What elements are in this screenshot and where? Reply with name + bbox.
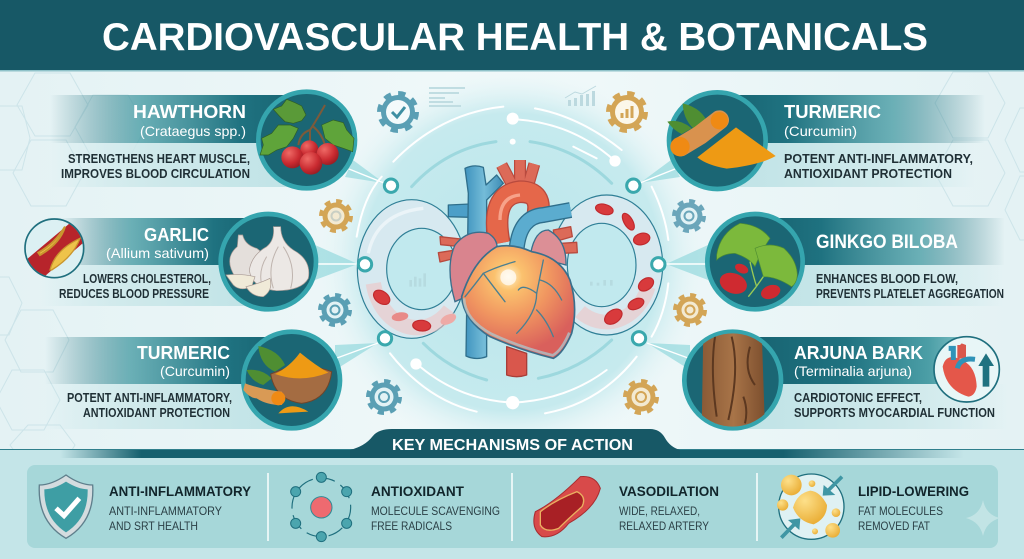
mechanism: antioxidant [291,472,500,542]
mechanism: lipid-lowering: REMOVED FAT [858,519,931,533]
ventricles [462,246,575,358]
panel: turmeric right: (Curcumin) [784,123,857,139]
icon: artery [534,476,600,537]
mechanism: antioxidant: FREE RADICALS [371,519,452,533]
panel: turmeric right [667,92,985,189]
sparkle [966,500,1000,536]
icon: gold gear lower right [625,381,657,413]
hexagon background pattern [0,72,1024,470]
icon: garlic bulbs [221,214,316,309]
central heart diagram [357,107,668,413]
panel: turmeric left: POTENT ANTI-INFLAMMATORY, [67,391,232,405]
panel: garlic: REDUCES BLOOD PRESSURE [59,287,209,301]
mechanisms band background [0,450,1024,559]
panel: ginkgo biloba [707,214,1005,309]
mechanism: lipid-lowering: FAT MOLECULES [858,504,943,518]
panel: arjuna bark [684,330,1010,430]
mechanism: antioxidant: MOLECULE SCAVENGING [371,504,500,518]
panel: garlic: LOWERS CHOLESTEROL, [83,272,211,286]
panel: ginkgo biloba: ENHANCES BLOOD FLOW, [816,272,958,286]
mechanism: lipid-lowering [777,474,969,539]
panel: garlic: GARLIC [144,224,209,245]
panel: turmeric left: ANTIOXIDANT PROTECTION [83,406,230,420]
coronary vessels [465,260,562,337]
panel: arjuna bark: CARDIOTONIC EFFECT, [794,391,922,405]
mechanism: anti-inflammatory: ANTI-INFLAMMATORY [109,504,222,518]
mechanism: vasodilation [534,476,719,537]
panel: turmeric left [45,332,340,429]
title banner: CARDIOVASCULAR HEALTH & BOTANICALS [102,16,928,59]
icon: turmeric root and powder [667,92,776,189]
panel: garlic: (Allium sativum) [106,245,209,261]
great vessels [438,160,577,377]
right circulation loop [551,195,663,335]
panel: garlic [20,214,316,309]
icon: molecule [291,472,352,542]
panel: hawthorn: IMPROVES BLOOD CIRCULATION [61,167,250,181]
panel: hawthorn: (Crataegus spp.) [140,123,246,139]
ventricle glass edge [464,298,569,355]
mechanism: vasodilation: WIDE, RELAXED, [619,504,700,518]
panel: turmeric left: TURMERIC [137,342,230,363]
atria [450,230,566,302]
panel: ginkgo biloba: GINKGO BILOBA [816,232,958,253]
icon: blue gear right top [674,201,704,231]
icon: fat molecules [777,474,844,539]
panel: turmeric right: ANTIOXIDANT PROTECTION [784,167,952,181]
circular arcs around heart [357,107,668,413]
connector beams [315,160,708,370]
heart highlight [500,269,516,285]
panel: hawthorn [50,92,355,188]
icon: blue gear left bottom [320,295,350,325]
icon: ginkgo leaves [707,214,803,309]
icon: hawthorn berries [258,92,355,188]
panel: mechanisms [27,465,1000,548]
mechanism: anti-inflammatory: AND SRT HEALTH [109,519,198,533]
panel: hawthorn: HAWTHORN [133,101,246,122]
connection nodes [358,179,665,345]
panel: arjuna bark: (Terminalia arjuna) [794,363,912,379]
mechanism: vasodilation: RELAXED ARTERY [619,519,709,533]
heading: key mechanisms of action [350,429,680,458]
panel: turmeric left: (Curcumin) [160,363,230,379]
decorative mini bar chart [565,86,596,106]
panel: turmeric right: POTENT ANTI-INFLAMMATORY, [784,152,973,166]
mechanism: vasodilation: VASODILATION [619,483,719,499]
central glow [314,64,710,460]
panel: hawthorn: STRENGTHENS HEART MUSCLE, [68,152,250,166]
panel: arjuna bark: ARJUNA BARK [794,342,924,363]
mechanism: antioxidant: ANTIOXIDANT [371,483,464,499]
icon: artery with plaque [24,218,84,278]
separator line [0,449,1024,458]
icon: turmeric bowl [243,332,340,428]
icon: gold gear left top [321,201,351,231]
decorative report lines [429,87,465,107]
icon: gold gear right bottom [675,295,705,325]
icon: shield [39,475,93,538]
panel: turmeric right: TURMERIC [784,101,881,122]
icon: heart with up arrow [934,337,999,402]
icon: blue gear lower left [368,381,400,413]
title banner [0,0,1024,72]
mechanism: anti-inflammatory [39,475,252,538]
mechanism: anti-inflammatory: ANTI-INFLAMMATORY [109,483,252,499]
icon: bark [684,330,781,430]
heading: key mechanisms of action: KEY MECHANISMS OF ACTION [392,437,633,454]
icon: gear with bars [608,94,646,130]
mechanism: lipid-lowering: LIPID-LOWERING [858,483,969,499]
left circulation loop [357,200,466,338]
panel: arjuna bark: SUPPORTS MYOCARDIAL FUNCTION [794,406,995,420]
icon: gear with check [380,94,416,130]
mini charts in loops [409,273,613,287]
